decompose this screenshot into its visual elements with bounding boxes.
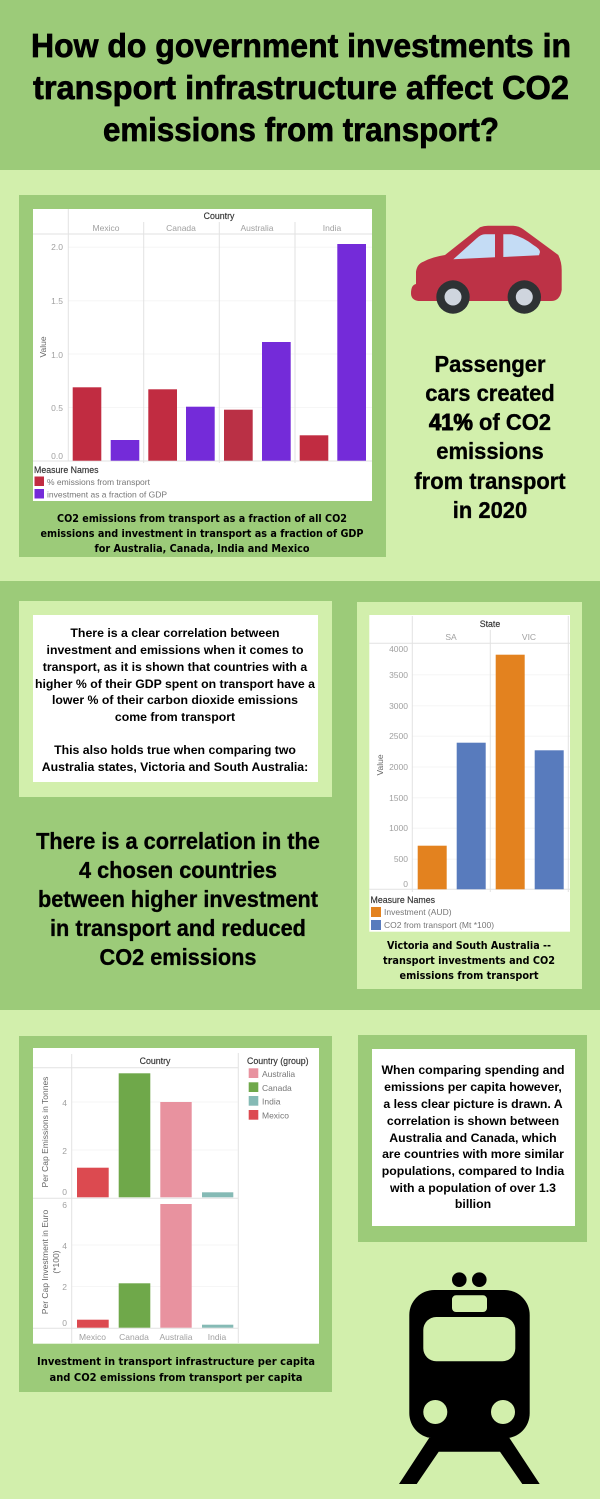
bar chart: emissions vs GDP investment: % emissions from transport — [47, 477, 151, 487]
title: emissions from transport? — [103, 111, 499, 148]
panel: correlation explanation — [19, 601, 332, 797]
bar chart: emissions vs GDP investment: 1.5 — [51, 296, 63, 306]
middle band — [0, 581, 600, 1010]
chart caption — [383, 941, 555, 982]
bar chart: per capita emissions and investment: Per Cap Emissions in Tonnes — [40, 1077, 50, 1187]
panel: per capita comparison — [19, 1036, 332, 1392]
callout: passenger cars statistic: from transport — [414, 467, 566, 494]
bar chart: emissions vs GDP investment: Measure Names — [34, 465, 99, 475]
callout: passenger cars statistic: cars created — [425, 379, 555, 406]
chart caption: Victoria and South Australia -- — [387, 941, 551, 952]
explanation text: There is a clear correlation between — [70, 626, 280, 640]
bar chart: emissions vs GDP investment: 0.5 — [51, 403, 63, 413]
explanation text: lower % of their carbon dioxide emissions — [52, 693, 298, 707]
bar chart: per capita emissions and investment: India — [208, 1332, 226, 1342]
explanation text: billion — [455, 1197, 491, 1211]
bar chart: per capita emissions and investment: 2 — [62, 1282, 67, 1292]
bar chart: emissions vs GDP investment: 1.0 — [51, 350, 63, 360]
chart caption — [40, 514, 364, 555]
callout: correlation statement: in transport and reduced — [50, 915, 306, 941]
bar chart: per capita emissions and investment: 4 — [62, 1241, 67, 1251]
chart caption: CO2 emissions from transport as a fraction of all CO2 — [57, 514, 347, 525]
explanation text — [35, 626, 315, 774]
callout: correlation statement: between higher investment — [38, 886, 318, 912]
callout: correlation statement: CO2 emissions — [100, 944, 256, 970]
bar chart: emissions vs GDP investment: Mexico — [93, 223, 120, 233]
bar chart: state investment vs emissions: 500 — [394, 854, 408, 864]
bar chart: per capita emissions and investment: 6 — [62, 1200, 67, 1210]
chart caption: emissions from transport — [400, 971, 539, 982]
bar chart: emissions vs GDP investment: Value — [38, 336, 48, 358]
explanation text: Australia states, Victoria and South Australia: — [42, 760, 308, 774]
callout: correlation statement: There is a correlation in the — [36, 828, 320, 854]
bar chart: per capita emissions and investment: 0 — [62, 1318, 67, 1328]
explanation text: populations, compared to India — [382, 1164, 564, 1178]
bar chart: emissions vs GDP investment: Australia — [240, 223, 274, 233]
callout: passenger cars statistic: in 2020 — [453, 496, 527, 523]
bar chart: emissions vs GDP investment: 2.0 — [51, 242, 63, 252]
bar chart: state investment vs emissions: 4000 — [389, 644, 408, 654]
bar chart: state investment vs emissions: 1000 — [389, 823, 408, 833]
chart caption: Investment in transport infrastructure per capita — [37, 1357, 315, 1368]
bar chart: state investment vs emissions: 3000 — [389, 701, 408, 711]
bar chart: state investment vs emissions: 3500 — [389, 670, 408, 680]
callout: correlation statement — [36, 828, 320, 970]
bar chart: state investment vs emissions: VIC — [522, 632, 536, 642]
bar chart: per capita emissions and investment: Country — [140, 1056, 171, 1066]
bar chart: per capita emissions and investment: India — [262, 1096, 281, 1106]
bar chart: emissions vs GDP investment: 0.0 — [51, 451, 63, 461]
callout: passenger cars statistic: 41% of CO2 — [429, 408, 551, 435]
bar chart: per capita emissions and investment: Canada — [119, 1332, 149, 1342]
bar chart: state investment vs emissions: 1500 — [389, 793, 408, 803]
bar chart: state investment vs emissions: Measure Names — [370, 895, 436, 905]
callout: passenger cars statistic — [414, 350, 566, 523]
explanation text: Australia and Canada, which — [389, 1131, 557, 1145]
explanation text — [381, 1063, 565, 1211]
bar chart: emissions vs GDP investment: Canada — [166, 223, 196, 233]
explanation text: with a population of over 1.3 — [389, 1181, 556, 1195]
bar chart: state investment vs emissions: Value — [375, 754, 385, 776]
explanation text: emissions per capita however, — [384, 1080, 562, 1094]
title — [31, 27, 571, 148]
explanation text: When comparing spending and — [381, 1063, 565, 1077]
bar chart: state investment vs emissions — [369, 615, 570, 932]
bar chart: state investment vs emissions: 2000 — [389, 762, 408, 772]
bar chart: emissions vs GDP investment: investment as a fraction of GDP — [47, 490, 167, 500]
explanation text: correlation is shown between — [387, 1114, 559, 1128]
bar chart: per capita emissions and investment: Country (group) — [247, 1056, 309, 1066]
bar chart: emissions vs GDP investment: Country — [204, 211, 235, 221]
bar chart: per capita emissions and investment: Mexico — [79, 1332, 106, 1342]
bar chart: per capita emissions and investment: Mexico — [262, 1110, 289, 1120]
chart caption: and CO2 emissions from transport per capita — [50, 1373, 303, 1384]
title: transport infrastructure affect CO2 — [33, 69, 569, 106]
bar chart: state investment vs emissions: Investment (AUD) — [384, 907, 452, 917]
bar chart: emissions vs GDP investment: India — [323, 223, 341, 233]
explanation text: higher % of their GDP spent on transport have a — [35, 677, 315, 691]
bar chart: per capita emissions and investment — [33, 1048, 319, 1344]
header band — [0, 0, 600, 170]
callout: passenger cars statistic: Passenger — [434, 350, 546, 377]
bar chart: state investment vs emissions: 2500 — [389, 731, 408, 741]
icon: red car — [411, 226, 562, 314]
chart caption: transport investments and CO2 — [383, 956, 555, 967]
bar chart: per capita emissions and investment: Australia — [159, 1332, 193, 1342]
bar chart: per capita emissions and investment: Canada — [262, 1083, 292, 1093]
title: How do government investments in — [31, 27, 571, 64]
explanation text: transport, as it is shown that countries with a — [43, 660, 307, 674]
icon: train — [399, 1272, 540, 1484]
chart caption: for Australia, Canada, India and Mexico — [94, 544, 310, 555]
callout: passenger cars statistic: emissions — [436, 437, 544, 464]
bar chart: state investment vs emissions: 0 — [403, 879, 408, 889]
explanation text: investment and emissions when it comes to — [47, 643, 304, 657]
explanation text: come from transport — [115, 710, 235, 724]
bar chart: state investment vs emissions: CO2 from transport (Mt *100) — [384, 920, 494, 930]
bar chart: state investment vs emissions: SA — [445, 632, 457, 642]
bar chart: emissions vs GDP investment — [33, 209, 372, 501]
panel: Victoria and South Australia — [357, 602, 582, 989]
bar chart: state investment vs emissions: State — [480, 619, 500, 629]
bar chart: per capita emissions and investment: Australia — [262, 1069, 295, 1079]
explanation text: are countries with more similar — [382, 1147, 564, 1161]
bar chart: per capita emissions and investment: Per Cap Investment in Euro — [40, 1210, 50, 1314]
bar chart: per capita emissions and investment: 0 — [62, 1187, 67, 1197]
bar chart: per capita emissions and investment: 2 — [62, 1146, 67, 1156]
chart caption: emissions and investment in transport as a fraction of GDP — [40, 529, 364, 540]
callout: correlation statement: 4 chosen countries — [79, 857, 277, 883]
bar chart: per capita emissions and investment: (*100) — [51, 1250, 61, 1274]
explanation text: a less clear picture is drawn. A — [383, 1097, 563, 1111]
panel: emissions and investment by country — [19, 195, 386, 557]
chart caption — [37, 1357, 315, 1384]
bar chart: per capita emissions and investment: 4 — [62, 1098, 67, 1108]
panel: per capita explanation — [358, 1035, 587, 1242]
explanation text: This also holds true when comparing two — [54, 743, 296, 757]
